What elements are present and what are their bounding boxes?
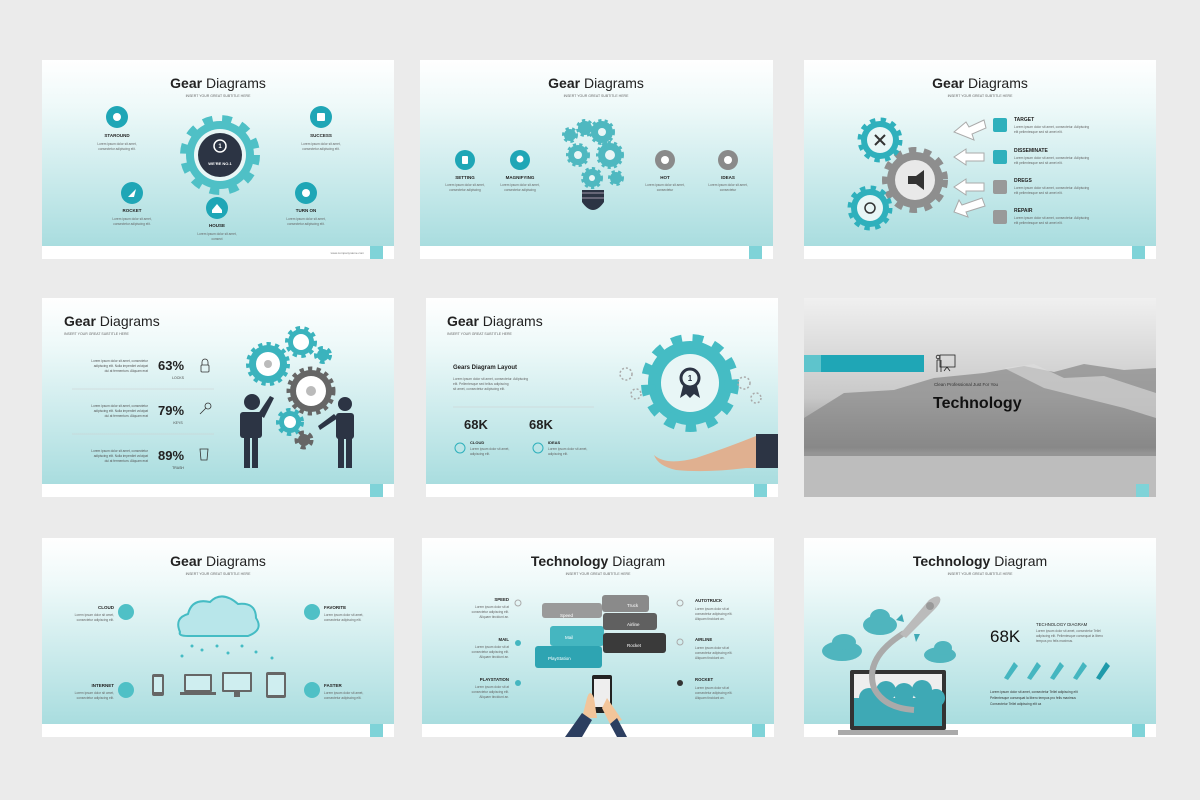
- items: consectetur adipiscing elit.: [472, 610, 509, 614]
- big gear in hand: 1: [688, 374, 693, 383]
- hand with phone: [565, 675, 627, 737]
- text block: [453, 365, 594, 456]
- slide 1: gear diagrams with we're no 1: STAROUND: [104, 133, 130, 138]
- stat: [990, 622, 1103, 646]
- items: consectetur adipiscing elit.: [324, 696, 361, 700]
- items: consectetur adipiscing elit.: [77, 618, 114, 622]
- cloud: [178, 596, 274, 660]
- text block: Lorem ipsum dolor sit amet,: [548, 447, 587, 451]
- items: Aliquam tincidunt an.: [695, 696, 725, 700]
- stats: adipiscing elit. Nulla imperdiet volutpat: [94, 409, 148, 413]
- bubbles: Airline: [627, 622, 640, 627]
- stats: dui at fermentum. Aliquam erat: [105, 414, 148, 418]
- central gear: WE'RE NO.1: [208, 161, 232, 166]
- items: DREGS: [1014, 178, 1032, 184]
- text block: Gears Diagram Layout: [453, 365, 517, 371]
- items: Lorem ipsum dolor sit at: [475, 645, 509, 649]
- items: Lorem ipsum dolor sit amet,: [500, 183, 540, 187]
- slide 1: gear diagrams with we're no 1: consectetur adipiscing elit.: [287, 222, 325, 226]
- big gear in hand: [620, 341, 778, 471]
- items: Lorem ipsum dolor sit amet,: [645, 183, 685, 187]
- stats: TRASH: [172, 466, 184, 470]
- items: TARGET: [1014, 117, 1034, 123]
- items: Lorem ipsum dolor sit amet, consectetur. Adipiscing: [1014, 156, 1089, 160]
- laptop with rocket: [838, 596, 958, 735]
- text block: Lorem ipsum dolor sit amet, consectetur Tellel adipiscing elit: [990, 690, 1078, 694]
- gears and people: [240, 329, 354, 468]
- title: Technology: [933, 395, 1022, 412]
- bubbles: Rocket: [627, 643, 642, 648]
- bubbles: Speed: [560, 613, 574, 618]
- items: consectetur adipiscing elit.: [472, 650, 509, 654]
- title: INSERT YOUR GREAT SUBTITLE HERE: [447, 332, 512, 336]
- items: Lorem ipsum dolor sit amet, consectetur. Adipiscing: [1014, 216, 1089, 220]
- text block: Lorem ipsum dolor sit amet,: [470, 447, 509, 451]
- title: [933, 382, 1022, 412]
- title: [932, 75, 1028, 98]
- text block: elit. Pellentesque sed tellus adipiscing: [453, 382, 509, 386]
- stats: 63%: [158, 358, 184, 373]
- items: CLOUD: [98, 605, 115, 610]
- title: Gear Diagrams: [64, 313, 160, 329]
- title: Technology Diagram: [913, 553, 1047, 569]
- items: Lorem ipsum dolor sit at: [695, 607, 729, 611]
- title: Clean Professional Just For You: [934, 382, 999, 387]
- slide 7: cloud devices: [42, 538, 394, 737]
- title: INSERT YOUR GREAT SUBTITLE HERE: [564, 94, 629, 98]
- items: consectetur adipiscing elit.: [695, 612, 732, 616]
- items: consectetur: [657, 188, 674, 192]
- slide 1: gear diagrams with we're no 1: consect: [212, 237, 223, 241]
- title: [548, 75, 644, 98]
- title: Gear Diagrams: [447, 313, 543, 329]
- slide 1: gear diagrams with we're no 1: HOUSE: [209, 223, 225, 228]
- slide 5: gears diagram layout with hand: [426, 298, 778, 497]
- stat: 68K: [990, 627, 1021, 646]
- items: IDEAS: [721, 175, 735, 180]
- items: REPAIR: [1014, 208, 1033, 214]
- rockets row: [1004, 662, 1110, 680]
- title: INSERT YOUR GREAT SUBTITLE HERE: [566, 572, 631, 576]
- stats: Lorem ipsum dolor sit amet, consectetur: [91, 449, 149, 453]
- stats: [72, 358, 214, 470]
- items: consectetur adipiscing elit.: [324, 618, 361, 622]
- text block: IDEAS: [548, 440, 561, 445]
- items: consectetur adipiscing elit.: [695, 691, 732, 695]
- items: [993, 117, 1089, 225]
- items: MAIL: [498, 637, 509, 642]
- items: consectetur: [720, 188, 737, 192]
- stat: tempus pro fells maximus.: [1036, 639, 1073, 643]
- text block: sit amet, consectetur adipiscing elit.: [453, 387, 505, 391]
- slide 1: gear diagrams with we're no 1: ROCKET: [122, 208, 142, 213]
- slide 1: gear diagrams with we're no 1: www.companyname.com: [331, 251, 364, 255]
- slide 1: gear diagrams with we're no 1: SUCCESS: [310, 133, 332, 138]
- text block: Pellentesque consequat la libero tempus pro fells maximus: [990, 696, 1076, 700]
- teal bar: [804, 355, 924, 372]
- stats: KEYS: [173, 421, 183, 425]
- items: Lorem ipsum dolor sit amet,: [445, 183, 485, 187]
- items: consectetur adipiscing elit.: [695, 651, 732, 655]
- text block: Consectetur Tellel adipiscing elit ca: [990, 702, 1041, 706]
- items: Lorem ipsum dolor sit at: [695, 686, 729, 690]
- title: Gear Diagrams: [932, 75, 1028, 91]
- title: Gear Diagrams: [170, 553, 266, 569]
- items: Lorem ipsum dolor sit at: [695, 646, 729, 650]
- items: consectetur adipiscing: [449, 188, 481, 192]
- items: Lorem ipsum dolor sit amet,: [708, 183, 748, 187]
- central gear: 1: [218, 144, 222, 150]
- title: [531, 553, 665, 576]
- slide 4: gears with people and percents: [42, 298, 394, 497]
- items: MAGNIFYING: [506, 175, 535, 180]
- title: [64, 313, 160, 336]
- text block: adipiscing elit.: [548, 452, 568, 456]
- gears: [851, 121, 943, 227]
- items: consectetur adipiscing elit.: [472, 690, 509, 694]
- slide 2: gear bulb: [420, 60, 773, 259]
- slide 1: gear diagrams with we're no 1: [42, 60, 394, 259]
- slide 1: gear diagrams with we're no 1: TURN ON: [296, 208, 316, 213]
- items: SPEED: [494, 597, 509, 602]
- items: [106, 106, 332, 219]
- items: Aliquam tincidunt an.: [479, 615, 509, 619]
- items: DISSEMINATE: [1014, 148, 1048, 154]
- title: Technology Diagram: [531, 553, 665, 569]
- bubbles: [535, 595, 666, 668]
- items: Lorem ipsum dolor sit amet,: [75, 691, 114, 695]
- stats: Lorem ipsum dolor sit amet, consectetur: [91, 359, 149, 363]
- items: SETTING: [455, 175, 475, 180]
- title: [170, 553, 266, 576]
- title: INSERT YOUR GREAT SUBTITLE HERE: [948, 572, 1013, 576]
- stat: adipiscing elit. Pellentesque consequat la libero: [1036, 634, 1103, 638]
- items: [472, 597, 732, 700]
- bubbles: Mail: [565, 635, 573, 640]
- items: elit pellentesque sed sit amet elit.: [1014, 130, 1063, 134]
- slide 9: technology diagram rocket laptop: [804, 538, 1156, 737]
- stats: LOCKS: [172, 376, 185, 380]
- stats: 79%: [158, 403, 184, 418]
- items: [445, 150, 748, 192]
- stats: Lorem ipsum dolor sit amet, consectetur: [91, 404, 149, 408]
- items: consectetur adipiscing: [504, 188, 536, 192]
- items: consectetur adipiscing elit.: [77, 696, 114, 700]
- clouds: [822, 609, 956, 663]
- items: Lorem ipsum dolor sit amet,: [75, 613, 114, 617]
- slide 1: gear diagrams with we're no 1: consectetur adipiscing elit.: [302, 147, 340, 151]
- items: PLAYSTATION: [480, 677, 509, 682]
- items: Aliquam tincidunt an.: [479, 695, 509, 699]
- title: INSERT YOUR GREAT SUBTITLE HERE: [64, 332, 129, 336]
- items: FASTER: [324, 683, 343, 688]
- devices: [152, 672, 286, 698]
- items: INTERNET: [92, 683, 114, 688]
- stats: dui at fermentum. Aliquam erat: [105, 459, 148, 463]
- title: [447, 313, 543, 336]
- slide 3: gears with arrows: [804, 60, 1156, 259]
- items: ROCKET: [695, 677, 714, 682]
- bubbles: PlayStation: [548, 656, 571, 661]
- slide 1: gear diagrams with we're no 1: Lorem ipsum dolor sit amet,: [112, 217, 152, 221]
- items: Lorem ipsum dolor sit amet, consectetur. Adipiscing: [1014, 186, 1089, 190]
- slide 1: gear diagrams with we're no 1: Lorem ipsum dolor sit amet,: [301, 142, 341, 146]
- items: Lorem ipsum dolor sit amet,: [324, 613, 363, 617]
- items: Aliquam tincidunt an.: [479, 655, 509, 659]
- title: [170, 75, 266, 98]
- title: [913, 553, 1047, 576]
- title: Gear Diagrams: [170, 75, 266, 91]
- items: elit pellentesque sed sit amet elit.: [1014, 191, 1063, 195]
- title: Gear Diagrams: [548, 75, 644, 91]
- title: INSERT YOUR GREAT SUBTITLE HERE: [186, 572, 251, 576]
- central gear: [186, 121, 254, 189]
- slide 1: gear diagrams with we're no 1: consectetur adipiscing elit.: [113, 222, 151, 226]
- items: AUTOTRUCK: [695, 598, 723, 603]
- items: AIRLINE: [695, 637, 712, 642]
- items: HOT: [660, 175, 670, 180]
- slide 1: gear diagrams with we're no 1: consectetur adipiscing elit.: [98, 147, 136, 151]
- stats: adipiscing elit. Nulla imperdiet volutpat: [94, 454, 148, 458]
- stats: 89%: [158, 448, 184, 463]
- items: elit pellentesque sed sit amet elit.: [1014, 221, 1063, 225]
- stat: Lorem ipsum dolor sit amet, consectetur Tellel: [1036, 629, 1101, 633]
- items: Lorem ipsum dolor sit amet,: [324, 691, 363, 695]
- slide 6: technology cover with mountains: [804, 331, 1156, 497]
- items: elit pellentesque sed sit amet elit.: [1014, 161, 1063, 165]
- icon: presentation: [936, 355, 955, 372]
- arrows: [954, 120, 986, 217]
- text block: adipiscing elit.: [470, 452, 490, 456]
- title: INSERT YOUR GREAT SUBTITLE HERE: [948, 94, 1013, 98]
- items: [75, 604, 363, 700]
- title: INSERT YOUR GREAT SUBTITLE HERE: [186, 94, 251, 98]
- items: Aliquam tincidunt an.: [695, 656, 725, 660]
- text block: [990, 690, 1078, 706]
- text block: 68K: [464, 417, 488, 432]
- text block: CLOUD: [470, 440, 484, 445]
- stat: TECHNOLOGY DIAGRAM: [1036, 622, 1088, 627]
- bulb of gears: [564, 121, 622, 210]
- slide 1: gear diagrams with we're no 1: Lorem ipsum dolor sit amet,: [97, 142, 137, 146]
- slide 1: gear diagrams with we're no 1: Lorem ipsum dolor sit amet,: [197, 232, 237, 236]
- stats: adipiscing elit. Nulla imperdiet volutpat: [94, 364, 148, 368]
- items: FAVORITE: [324, 605, 346, 610]
- stats: dui at fermentum. Aliquam erat: [105, 369, 148, 373]
- items: Aliquam tincidunt an.: [695, 617, 725, 621]
- text block: 68K: [529, 417, 553, 432]
- items: Lorem ipsum dolor sit amet, consectetur. Adipiscing: [1014, 125, 1089, 129]
- text block: Lorem ipsum dolor sit amet, consectetur. Adipiscing: [453, 377, 528, 381]
- slide 8: technology diagram with phone bubbles: [422, 538, 774, 737]
- items: Lorem ipsum dolor sit at: [475, 685, 509, 689]
- slide 1: gear diagrams with we're no 1: Lorem ipsum dolor sit amet,: [286, 217, 326, 221]
- items: Lorem ipsum dolor sit at: [475, 605, 509, 609]
- bubbles: Truck: [627, 603, 639, 608]
